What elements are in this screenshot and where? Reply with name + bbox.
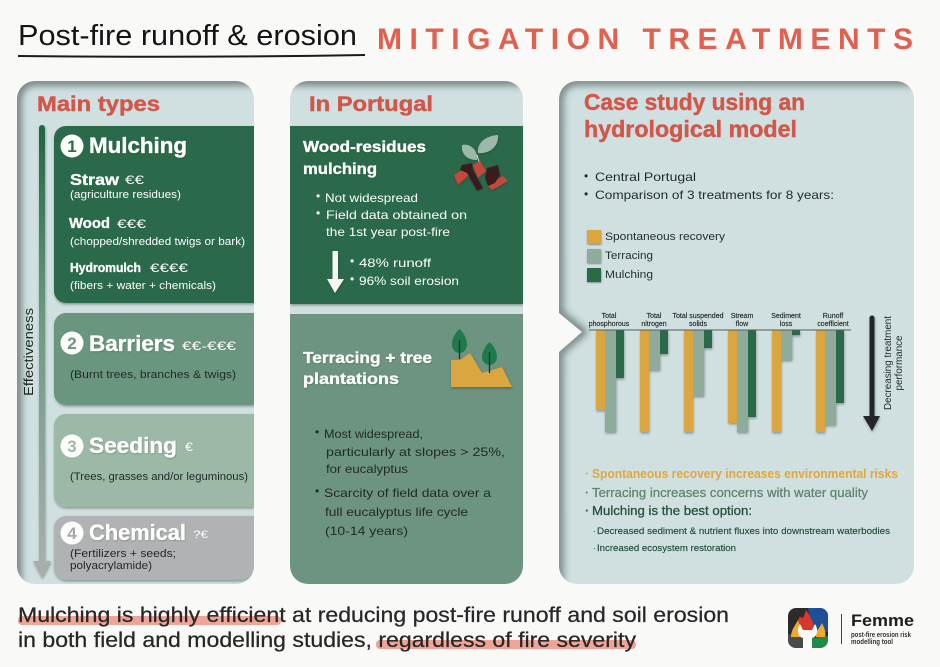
icon: terrace with trees [451, 329, 512, 387]
bullets: terracing notes [315, 425, 505, 538]
heading: case study: hydrological model [584, 116, 797, 142]
heading: wood-residues mulching [303, 139, 426, 178]
badge: 3 [60, 434, 84, 458]
badge: 1 [60, 134, 84, 158]
bullets: reductions [350, 258, 458, 285]
description: seeding: (Trees, grasses and/or leguminous) [70, 471, 248, 483]
legend: Spontaneous recovery [605, 231, 726, 243]
bullets: study design [584, 169, 834, 202]
item: hydromulch [70, 261, 216, 292]
description: barriers: (Burnt trees, branches & twigs) [70, 369, 236, 381]
takeaway: first line: Mulching is highly efficient at reducing post-fire runoff and soil erosion [18, 603, 729, 627]
heading: wood-residues mulching: mulching [303, 161, 377, 178]
highlight: second line [376, 640, 636, 649]
bullets: reductions: • [350, 254, 354, 268]
badge: 3: 3 [67, 437, 77, 456]
item: straw: €€ [125, 173, 144, 187]
heading: terracing: plantations [303, 371, 399, 388]
arrow label [883, 316, 905, 410]
icon: leaves and wood residues [454, 135, 508, 191]
takeaway: second line: in both field and modelling studies, regardless of fire severity [18, 628, 636, 652]
title: underline [18, 55, 365, 57]
card: barriers [54, 313, 254, 405]
bullets: terracing notes: • [315, 425, 319, 439]
description: chemical: (Fertilizers + seeds; [70, 548, 176, 560]
heading: wood-residues mulching: Wood-residues [303, 139, 426, 156]
heading: mulching: Mulching [89, 133, 187, 158]
chart labels: coefficient [817, 321, 849, 328]
chart labels: solids [689, 321, 707, 328]
conclusions: Terracing increases concerns with water quality [592, 486, 869, 500]
card: terracing and tree plantations [290, 314, 523, 584]
chart labels: nitrogen [641, 321, 667, 328]
tagline: post-fire erosion risk [851, 632, 911, 639]
title: mitigation treatments: MITIGATION TREATMENTS [377, 23, 913, 56]
cost: chemical: ?€ [193, 529, 208, 541]
bullets: study design: • [584, 187, 588, 201]
description: chemical [70, 548, 176, 572]
legend: Terracing [605, 250, 653, 262]
logo: Femme [788, 608, 914, 648]
arrow: decreasing treatment performance [863, 316, 905, 431]
conclusions [585, 467, 898, 554]
badge: 2 [60, 332, 84, 354]
panel: case study [559, 81, 914, 584]
bullets: study design: • [584, 169, 588, 183]
axis label: effectiveness: Effectiveness [21, 307, 36, 396]
bullets: terracing notes: full eucalyptus life cycle [325, 505, 468, 519]
badge: 1: 1 [67, 137, 77, 156]
title: handwritten line: Post-fire runoff & erosion [18, 20, 357, 52]
chart labels: Sediment [771, 313, 801, 320]
bullets: study design: Comparison of 3 treatments for 8 years: [595, 188, 834, 202]
chart labels: Total suspended [673, 313, 724, 320]
icon: Femme app [788, 608, 828, 648]
badge: 4: 4 [67, 524, 77, 543]
bullets: reductions: 96% soil erosion [359, 274, 459, 288]
chart axis [589, 329, 851, 331]
chart labels: Total [647, 313, 662, 320]
cost: seeding: € [185, 440, 193, 454]
bullets: field data: • [316, 189, 320, 203]
item: hydromulch: Hydromulch [70, 261, 141, 275]
heading: terracing: Terracing + tree [303, 350, 432, 367]
item: straw: (agriculture residues) [70, 189, 181, 201]
arrow: effectiveness [33, 125, 51, 578]
chart bars [596, 330, 844, 432]
card: mulching [54, 126, 254, 303]
description: chemical: polyacrylamide) [70, 560, 152, 572]
heading: in Portugal: In Portugal [309, 93, 433, 116]
bullets: reductions: 48% runoff [359, 256, 432, 270]
conclusions: Increased ecosystem restoration [597, 543, 736, 554]
bullets: terracing notes: particularly at slopes > 25%, [326, 445, 505, 459]
highlight: first line [18, 616, 281, 625]
card: seeding [54, 414, 254, 507]
arrow label: Decreasing treatment [883, 316, 894, 410]
tagline [851, 632, 911, 646]
item: straw [70, 172, 181, 201]
chart labels: flow [736, 321, 749, 328]
bullets: terracing notes: Scarcity of field data over a [324, 486, 491, 500]
item: straw: Straw [70, 172, 120, 189]
arrow label: performance [894, 335, 905, 390]
conclusions: Spontaneous recovery increases environmental risks [592, 467, 898, 481]
heading: case study: Case study using an [584, 89, 805, 115]
bullets: terracing notes: Most widespread, [324, 427, 423, 441]
conclusions: · [585, 486, 589, 500]
item: wood: Wood [69, 215, 110, 232]
chart labels: Runoff [823, 313, 843, 320]
cost: barriers: €€-€€€ [182, 339, 236, 353]
chart labels [589, 313, 849, 328]
bullets: field data: • [316, 206, 320, 220]
heading: terracing [303, 350, 432, 388]
badge: 2: 2 [67, 334, 77, 353]
conclusions: Decreased sediment & nutrient fluxes into downstream waterbodies [597, 526, 890, 537]
legend: Mulching [605, 269, 653, 281]
bullets: terracing notes: for eucalyptus [326, 462, 408, 476]
panel: main types [17, 81, 254, 584]
card: wood-residues mulching [290, 126, 523, 304]
legend [587, 230, 726, 282]
conclusions: · [585, 504, 589, 518]
panel: in Portugal [290, 81, 523, 584]
card: chemical [54, 516, 254, 580]
wordmark: Femme [851, 611, 914, 630]
bullets: field data: Field data obtained on [326, 208, 467, 222]
item: wood: (chopped/shredded twigs or bark) [70, 236, 245, 248]
badge: 4 [60, 522, 84, 544]
chart labels: phosphorous [589, 321, 630, 328]
heading: barriers: Barriers [89, 331, 175, 356]
bullets: study design: Central Portugal [595, 170, 696, 184]
bullets: terracing notes: (10-14 years) [325, 524, 408, 538]
item: wood: €€€ [117, 217, 146, 231]
tagline: modelling tool [851, 639, 893, 646]
takeaway message [18, 603, 729, 652]
bullets: field data: Not widespread [325, 191, 418, 205]
bullets: terracing notes: • [315, 484, 319, 498]
item: hydromulch: (fibers + water + chemicals) [70, 280, 216, 292]
chart labels: loss [780, 321, 793, 328]
conclusions: · [585, 467, 589, 481]
conclusions: Mulching is the best option: [592, 504, 752, 518]
heading: seeding: Seeding [89, 433, 177, 458]
arrow: reduction [327, 251, 344, 293]
item: hydromulch: €€€€ [150, 261, 188, 275]
title [18, 20, 913, 57]
bar chart [589, 313, 851, 432]
heading: main types: Main types [37, 93, 160, 116]
chart labels: Stream [731, 313, 753, 320]
chart labels: Total [602, 313, 617, 320]
heading: chemical: Chemical [89, 520, 186, 545]
conclusions: · [593, 526, 596, 537]
conclusions: · [593, 543, 596, 554]
heading: case study [584, 89, 805, 142]
bullets: field data: the 1st year post-fire [326, 225, 450, 239]
bullets: field data [316, 194, 466, 238]
divider [840, 614, 842, 644]
bullets: reductions: • [350, 272, 354, 286]
item: wood [69, 215, 245, 248]
